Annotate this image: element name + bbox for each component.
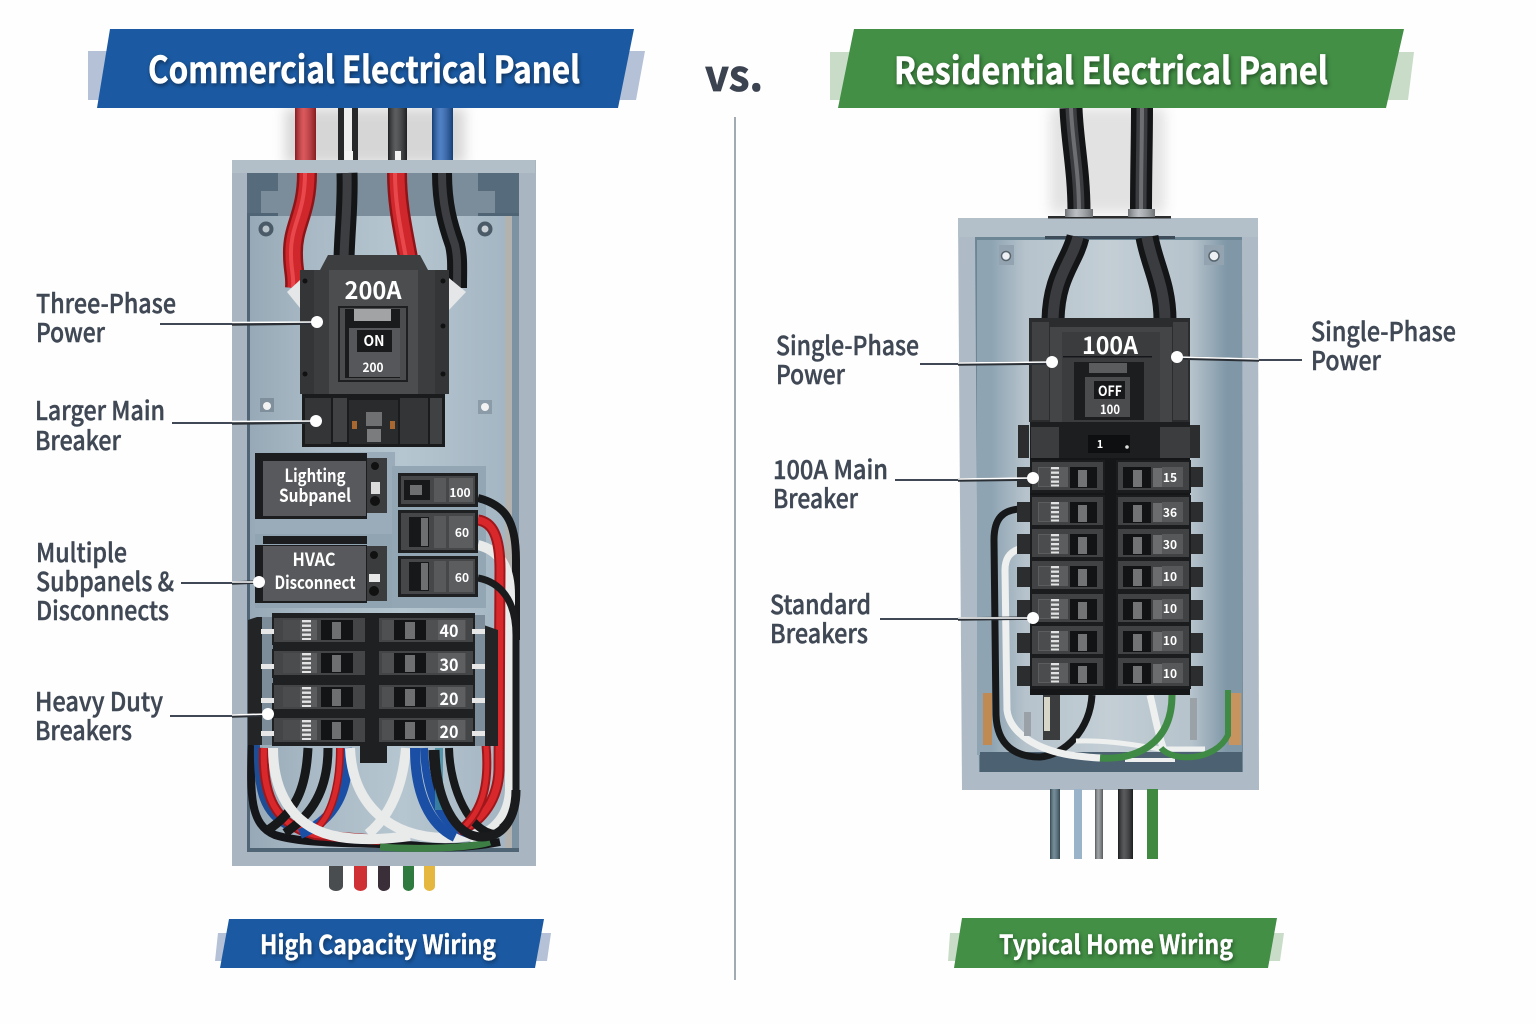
caption text: high capacity wiring: High Capacity Wiring	[260, 925, 496, 962]
breaker ratings: residential: 10	[1163, 600, 1177, 617]
bottom wiring: commercial	[251, 745, 516, 848]
wire stubs: residential	[1050, 789, 1158, 859]
lighting subpanel label: Lighting	[284, 462, 346, 488]
main feed wires: commercial	[287, 173, 466, 310]
enclosure: residential	[958, 209, 1259, 790]
divider line	[734, 117, 736, 980]
title text: residential: Residential Electrical Panel	[894, 41, 1328, 95]
side wires: residential	[994, 509, 1228, 760]
breaker ratings: residential: 36	[1163, 504, 1177, 521]
heavy duty breaker bank: 30	[440, 651, 458, 676]
disconnect breakers: 60	[455, 524, 469, 541]
incoming wires: residential	[1050, 108, 1165, 213]
enclosure: commercial	[232, 160, 536, 866]
label: single-phase power left: Power	[776, 355, 845, 392]
label: multiple subpanels and disconnects: Multiple	[36, 533, 127, 570]
breaker ratings: residential: 10	[1163, 665, 1177, 682]
caption banner: high capacity wiring	[215, 919, 551, 968]
incoming wires: commercial	[285, 108, 465, 164]
breaker ratings: residential: 30	[1163, 536, 1177, 553]
disconnect breakers: 60	[455, 569, 469, 586]
heavy duty breaker bank: 20	[440, 718, 458, 743]
breaker ratings: residential: 10	[1163, 568, 1177, 585]
title text: commercial: Commercial Electrical Panel	[148, 40, 580, 94]
main feed wires: residential	[1053, 237, 1165, 320]
breaker ratings: residential: 15	[1163, 469, 1177, 486]
heavy duty breaker bank	[248, 613, 498, 763]
label: multiple subpanels and disconnects: Subpanels &	[36, 562, 174, 599]
lighting subpanel	[255, 453, 387, 519]
vs. label: vs.	[705, 42, 763, 104]
breaker ratings: residential	[1163, 469, 1177, 682]
lug block: residential	[1018, 422, 1200, 460]
switch state OFF: OFF	[1098, 381, 1122, 401]
label: three-phase power: Three-Phase	[36, 284, 176, 321]
disconnect ratings: 100	[449, 484, 471, 501]
lighting subpanel: Subpanel	[279, 482, 351, 508]
label: heavy duty breakers: Breakers	[35, 711, 132, 748]
labels: commercial	[35, 284, 176, 748]
HVAC disconnect label: HVAC	[292, 546, 336, 572]
breaker ratings: commercial: 40	[440, 617, 458, 642]
HVAC disconnect: Disconnect	[274, 569, 356, 595]
breaker rating 100A: 100A	[1082, 326, 1139, 361]
title banner: residential	[830, 29, 1414, 108]
disconnect breakers	[398, 473, 478, 597]
label: single-phase power left: Single-Phase	[776, 326, 919, 363]
bus label 1: 1	[1097, 436, 1103, 452]
heavy duty breaker bank: 20	[440, 685, 458, 710]
standard breaker bank	[1017, 458, 1203, 695]
label: standard breakers: Breakers	[770, 614, 868, 651]
label: 100A main breaker: Breaker	[773, 479, 858, 516]
label: three-phase power: Power	[36, 313, 105, 350]
labels: residential	[770, 312, 1456, 651]
panel: commercial electrical panel	[232, 108, 536, 891]
lug block	[302, 394, 445, 447]
breaker ratings: residential: 10	[1163, 632, 1177, 649]
label: multiple subpanels and disconnects: Disconnects	[36, 591, 169, 628]
leader lines and dots	[160, 316, 1302, 720]
breaker rating 200A: 200A	[344, 271, 402, 306]
label: larger main breaker: Larger Main	[35, 391, 165, 428]
label: single-phase power right: Single-Phase	[1311, 312, 1456, 349]
long feeder wires	[432, 498, 516, 840]
switch rating 200: 200	[362, 357, 384, 376]
switch rating 100: 100	[1100, 399, 1120, 418]
title banner: commercial	[88, 29, 645, 108]
label: standard breakers: Standard	[770, 585, 871, 622]
label: 100A main breaker: 100A Main	[773, 450, 888, 487]
switch state ON: ON	[364, 330, 384, 351]
wire stubs: commercial	[329, 866, 435, 891]
caption text: typical home wiring: Typical Home Wiring	[999, 925, 1233, 962]
HVAC disconnect	[255, 536, 387, 603]
main breaker 100A	[1029, 318, 1190, 422]
main breaker 200A	[300, 255, 449, 394]
panel: residential electrical panel	[958, 108, 1259, 859]
copper bus bars	[983, 693, 1241, 745]
label: heavy duty breakers: Heavy Duty	[35, 682, 163, 719]
caption banner: typical home wiring	[948, 918, 1284, 968]
label: single-phase power right: Power	[1311, 341, 1381, 378]
label: larger main breaker: Breaker	[35, 421, 121, 458]
